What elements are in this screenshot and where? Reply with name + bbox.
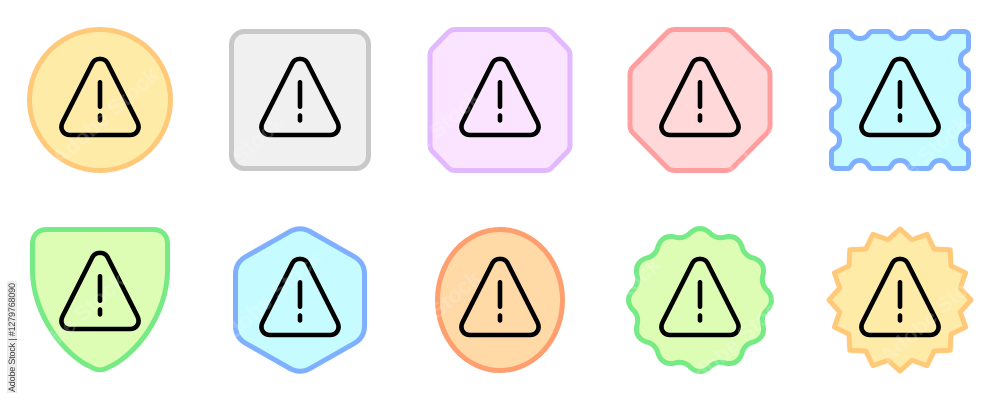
badge: blue hexagon warning	[236, 229, 364, 371]
watermark: repeated stock text: Adobe Stock	[172, 110, 289, 219]
watermark: repeated stock text: Adobe Stock	[369, 265, 486, 374]
watermark: repeated stock text: Adobe Stock	[14, 268, 131, 377]
badge: green shield warning	[32, 230, 168, 370]
watermark: repeated stock text: Adobe Stock	[677, 288, 794, 397]
watermark: repeated stock text: Adobe Stock	[517, 105, 634, 214]
watermark: repeated stock text: Adobe Stock	[857, 110, 974, 219]
watermark: repeated stock text: Adobe Stock	[707, 90, 824, 199]
watermark: repeated stock text: Adobe Stock	[549, 252, 666, 361]
watermark: repeated stock text: Adobe Stock	[875, 260, 992, 369]
badge: orange oval warning	[438, 230, 562, 370]
watermark: repeated stock text: Adobe Stock	[210, 245, 327, 354]
badge: yellow circle warning	[30, 30, 170, 170]
badge: red octagon warning	[630, 30, 770, 170]
stock id label: Adobe Stock | #1279768090	[7, 283, 17, 392]
watermark: repeated stock text: Adobe Stock	[369, 85, 486, 194]
badge: blue postage stamp warning	[832, 32, 968, 168]
badge: grey rounded square warning	[232, 32, 368, 168]
badge: green wavy seal warning	[629, 229, 771, 371]
badge: purple chamfered square warning	[430, 30, 570, 170]
watermark: repeated stock text: Adobe Stock	[47, 62, 164, 171]
badge: yellow starburst warning	[829, 229, 971, 371]
